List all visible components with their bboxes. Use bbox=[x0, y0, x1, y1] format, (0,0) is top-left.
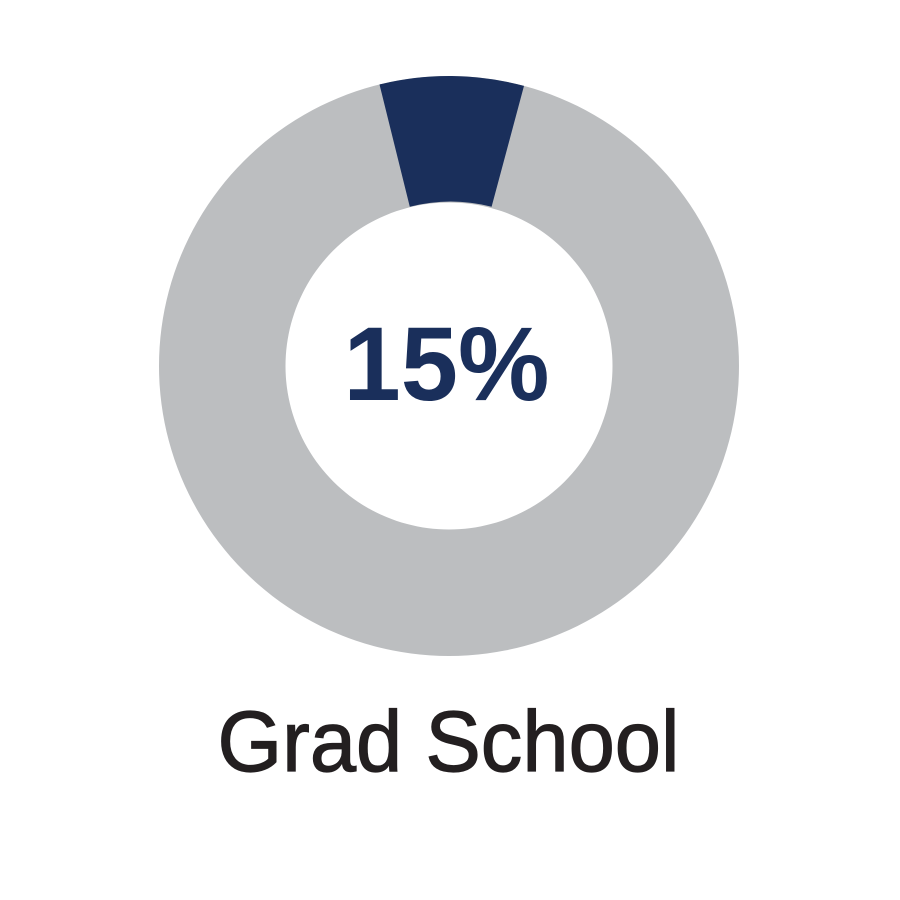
center value: 15% bbox=[344, 306, 550, 423]
label: Grad School: Grad School bbox=[218, 694, 680, 790]
donut segment: 15 percent bbox=[380, 76, 524, 207]
donut ring: remainder bbox=[159, 76, 739, 656]
donut chart: ring with highlighted segment bbox=[159, 76, 739, 656]
